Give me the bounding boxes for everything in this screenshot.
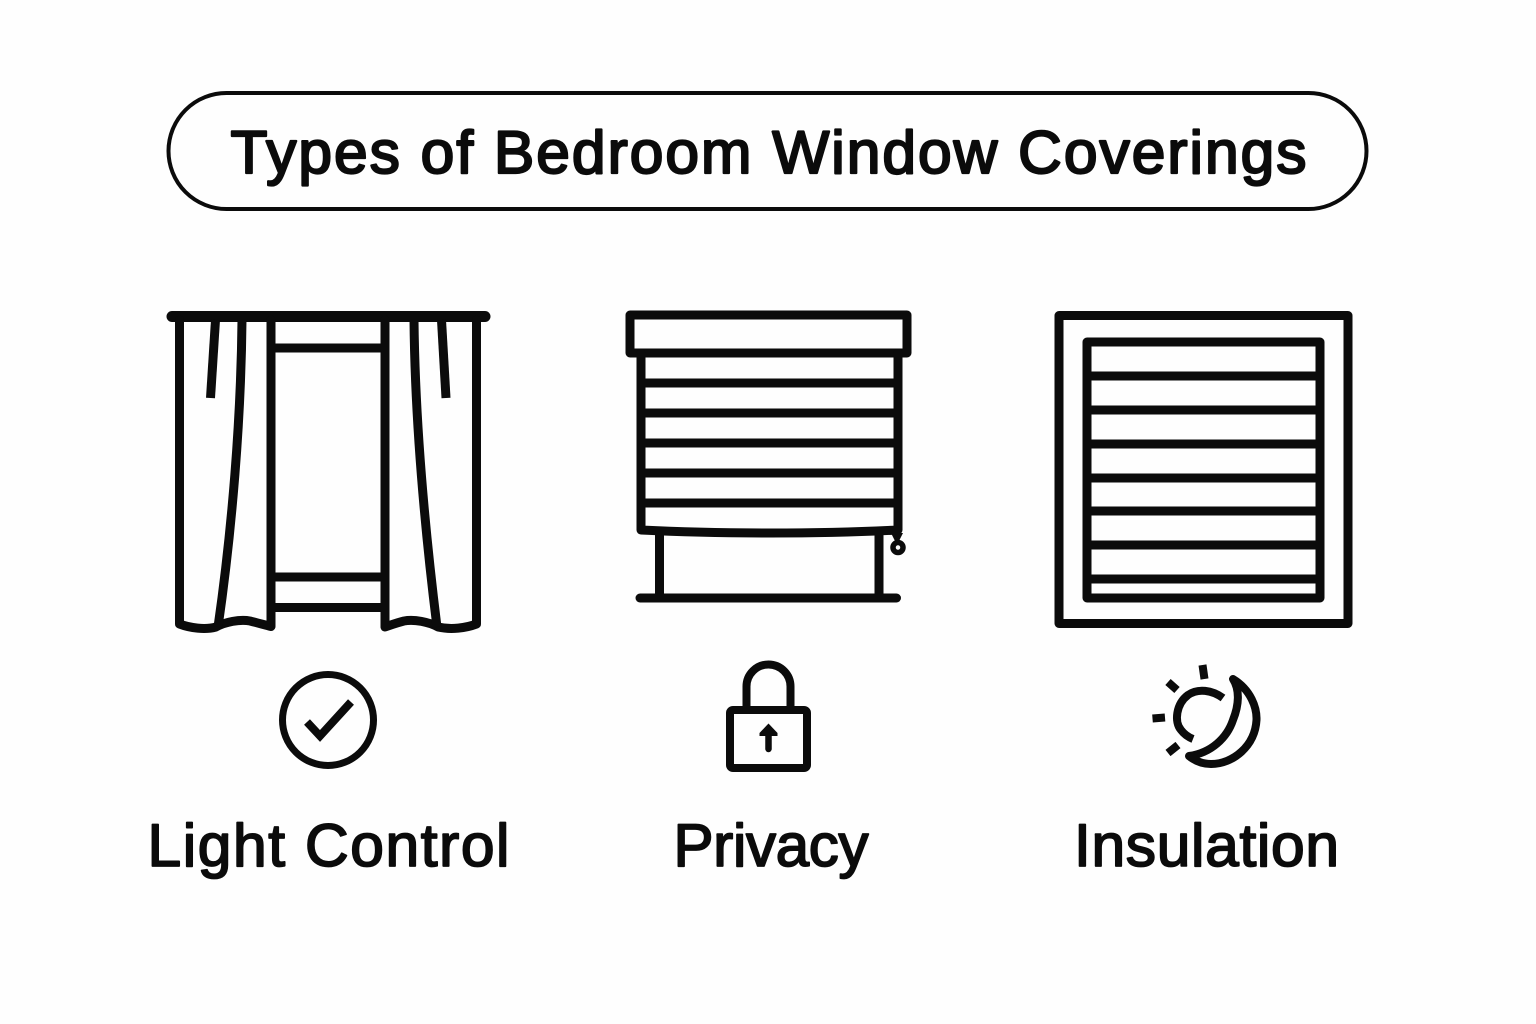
icon: roller blind — [630, 315, 907, 598]
icon: padlock — [730, 664, 807, 768]
icon: curtains — [172, 316, 485, 628]
icon: sun and moon — [1152, 665, 1257, 764]
label: Insulation: Insulation — [1074, 811, 1339, 879]
label: Privacy: Privacy — [674, 812, 868, 879]
title — [168, 93, 1366, 209]
title: Types of Bedroom Window Coverings — [230, 118, 1306, 186]
label: Light Control: Light Control — [148, 811, 510, 879]
icon: shutter — [1059, 316, 1348, 624]
icon: check circle — [282, 674, 374, 766]
